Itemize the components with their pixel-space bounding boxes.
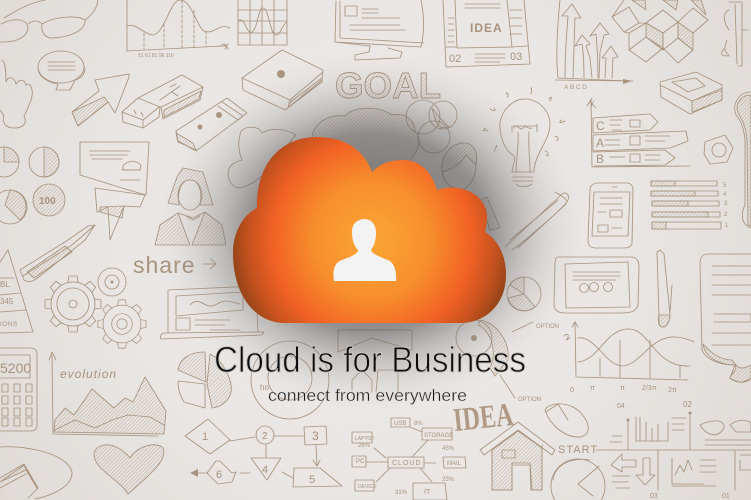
dark glow behind cloud bbox=[155, 54, 585, 410]
icon: lightbulb bbox=[483, 88, 565, 187]
chart: venn bbox=[406, 100, 457, 153]
chart: horizontal bars bbox=[651, 181, 729, 229]
chart: cloud mind map: PC bbox=[356, 459, 365, 465]
chart: pyramid: IONS bbox=[0, 321, 18, 328]
chart: wave lines: 04 bbox=[617, 403, 625, 410]
label: IDEA: IDEA bbox=[452, 397, 515, 439]
chart: bell curve bbox=[127, 0, 230, 59]
icon: open pie bottom left bbox=[0, 447, 72, 499]
icon: calculator bbox=[0, 348, 37, 431]
icon: laptop bbox=[160, 286, 264, 339]
chart: arrows: ABCD bbox=[564, 84, 588, 91]
callout: option bottom: OPTION bbox=[518, 397, 541, 403]
icon: nut bbox=[704, 135, 733, 164]
chart: cloud mind map: 25% bbox=[442, 477, 455, 483]
chart: pyramid bbox=[0, 250, 33, 333]
icon: pointing hand bbox=[0, 60, 32, 128]
chart: horizontal bars: 1 bbox=[725, 223, 729, 229]
chart: flowchart bbox=[185, 419, 342, 487]
chart: cloud mind map: 31% bbox=[395, 490, 408, 496]
title: Cloud is for Business bbox=[214, 339, 526, 380]
icon: gears bbox=[45, 268, 146, 348]
chart: cloud mind map: 8% bbox=[414, 421, 423, 427]
chart: pyramid: BL bbox=[0, 280, 10, 289]
chart: flowchart: 5 bbox=[309, 474, 315, 486]
chart: circular diagram bbox=[456, 320, 508, 376]
chart: wave lines: 0 bbox=[570, 387, 574, 394]
icon: smartphone bbox=[176, 98, 247, 151]
chart: timeline bars bbox=[610, 417, 751, 445]
icon: pen bbox=[657, 250, 672, 327]
chart: flowchart: 6 bbox=[216, 469, 222, 481]
chart: arrows bbox=[555, 0, 633, 91]
chart: horizontal bars: 5 bbox=[723, 183, 727, 189]
icon: square router box bbox=[242, 50, 323, 110]
icon: outline cloud behind bbox=[228, 127, 296, 188]
chart: flowchart: 3 bbox=[312, 429, 319, 443]
chart: labelled arrows: C bbox=[596, 119, 605, 133]
label: share: share bbox=[133, 252, 196, 278]
panel: idea grid: IDEA bbox=[470, 21, 503, 35]
icon: usb drive bbox=[122, 75, 203, 128]
icon: person silhouette bbox=[333, 219, 396, 281]
icon: computer mouse bbox=[545, 404, 588, 437]
icon: pencil left bbox=[20, 225, 95, 282]
chart: flowchart: 1 bbox=[202, 431, 208, 443]
chart: timeline lower: 01 bbox=[722, 493, 730, 500]
chart: wave lines: π bbox=[620, 385, 625, 392]
icon: house bbox=[480, 422, 555, 490]
callout: option top: OPTION bbox=[536, 324, 559, 330]
icon: wrench bbox=[735, 92, 751, 228]
chart: cloud mind map: LAPTOP bbox=[355, 436, 375, 442]
chart: bars behind title bbox=[338, 330, 412, 394]
chart: horizontal bars: 3 bbox=[724, 201, 728, 207]
icon: speech bubble bbox=[38, 51, 85, 90]
cloud shape bbox=[233, 137, 506, 323]
label: START timeline bbox=[558, 412, 751, 490]
icon: tablet phone bbox=[588, 183, 633, 248]
chart: horizontal bars: 4 bbox=[723, 192, 727, 198]
chart: labelled arrows: y bbox=[590, 98, 594, 107]
chart: labelled arrows: A bbox=[596, 136, 604, 150]
chart: donut behind title: ho bbox=[260, 383, 269, 392]
panel: idea grid: 02 bbox=[449, 53, 461, 65]
icon: document speech bubble bbox=[700, 254, 751, 382]
icon: woman figure bbox=[155, 168, 226, 245]
panel: tablet sketch bbox=[554, 257, 639, 313]
icon: ribbon banner bbox=[80, 142, 149, 240]
icon: pencil right bbox=[505, 192, 568, 250]
chart: bell curve: 51 61 81 96 116 bbox=[138, 53, 174, 59]
chart: evolution bbox=[49, 352, 166, 436]
chart: evolution: evolution bbox=[60, 367, 117, 381]
callout: option bottom bbox=[500, 375, 541, 403]
icon: big arrow bbox=[72, 74, 129, 126]
icon: pie circles bbox=[0, 147, 65, 224]
panel: idea grid: 03 bbox=[510, 51, 522, 63]
chart: labelled arrows: B bbox=[596, 152, 604, 166]
chart: wave lines: 02 bbox=[683, 400, 692, 409]
icon: tool bbox=[722, 2, 748, 66]
icon: hatched cloud behind bbox=[312, 108, 419, 175]
icon: hexagonal cubes bbox=[612, 0, 708, 63]
chart: labelled arrows bbox=[587, 98, 690, 167]
chart: cloud mind map: IT bbox=[424, 489, 431, 496]
icon: glasses bbox=[0, 0, 98, 42]
icon: pie circles: 100 bbox=[39, 196, 56, 207]
chart: cloud mind map: STORAGE bbox=[424, 433, 453, 439]
cloud with person bbox=[233, 137, 506, 323]
chart: timeline lower bbox=[611, 454, 751, 500]
chart: cloud mind map: CLOUD bbox=[392, 460, 422, 467]
chart: flowchart: 4 bbox=[262, 464, 268, 476]
chart: sine grid bbox=[238, 0, 287, 45]
chart: horizontal bars: 2 bbox=[724, 212, 728, 218]
icon: monitor bbox=[335, 0, 424, 60]
panel: idea grid bbox=[443, 0, 530, 67]
icon: device box bbox=[660, 72, 722, 114]
chart: pyramid: 345 bbox=[0, 297, 14, 306]
callout: option top bbox=[512, 322, 559, 332]
chart: timeline lower: 03 bbox=[650, 493, 658, 500]
chart: wave lines: 2π bbox=[668, 387, 677, 394]
chart: wave lines: π bbox=[590, 385, 595, 392]
chart: cloud mind map: DEVICE bbox=[358, 484, 377, 490]
chart: flowchart: 2 bbox=[262, 431, 268, 442]
chart: cloud mind map: USB bbox=[394, 421, 406, 427]
chart: wave lines: 2/3π bbox=[642, 385, 657, 392]
chart: cloud mind map: 45% bbox=[442, 446, 455, 452]
icon: calculator: 5200 bbox=[0, 360, 31, 376]
chart: pie right bbox=[507, 277, 541, 311]
icon: heart bbox=[94, 445, 164, 494]
chart: cloud mind map: MAIL bbox=[447, 461, 462, 467]
icon: man figure bbox=[442, 143, 500, 230]
chart: wave lines bbox=[564, 322, 694, 410]
chart: pie exploded bbox=[178, 352, 231, 408]
label: GOAL: GOAL bbox=[335, 65, 441, 106]
chart: donut behind title bbox=[251, 341, 329, 419]
chart: cloud mind map bbox=[352, 418, 466, 500]
label: START timeline: START bbox=[558, 444, 598, 456]
chart: cloud mind map: 26% bbox=[358, 443, 371, 449]
icon: clock bbox=[551, 459, 605, 500]
subtitle: connect from everywhere bbox=[268, 386, 467, 405]
